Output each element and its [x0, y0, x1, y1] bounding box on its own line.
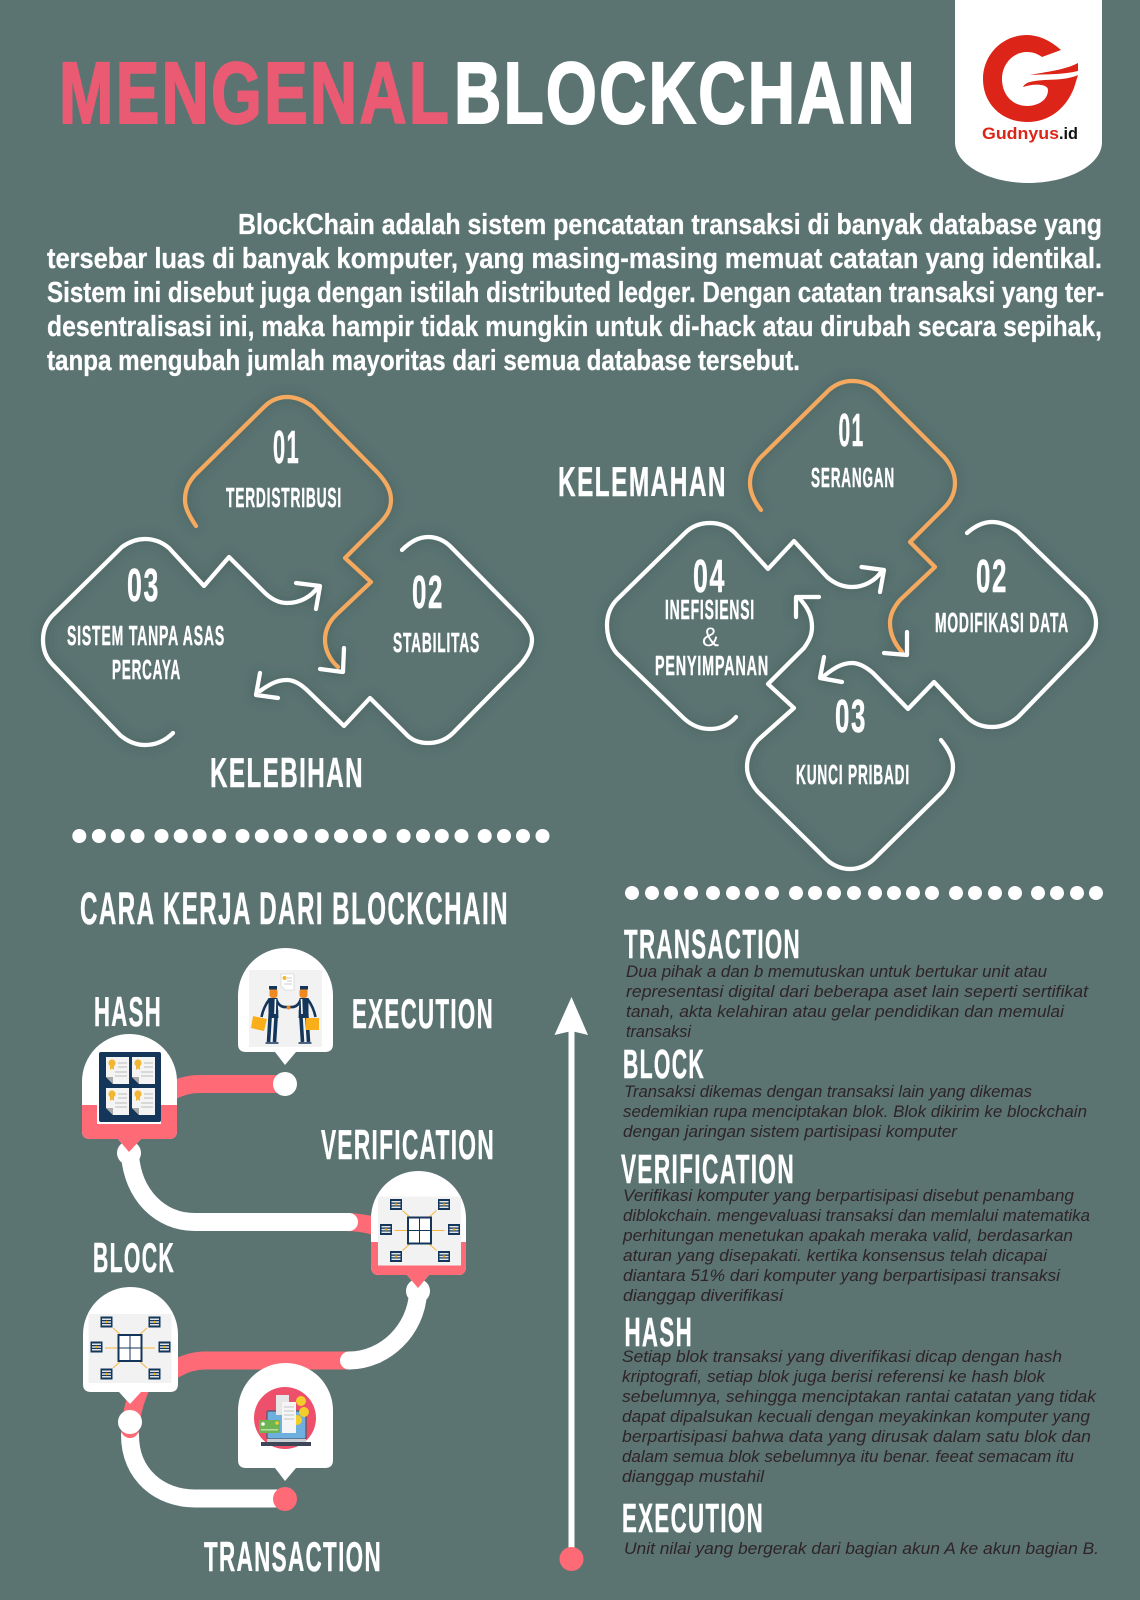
- panel: kelemahan cycle: SERANGAN: [811, 462, 895, 493]
- text block: execution: [622, 1495, 1099, 1558]
- item 02: 02: [976, 550, 1008, 602]
- text block: execution: EXECUTION: [622, 1495, 764, 1541]
- label: transaction: TRANSACTION: [204, 1533, 382, 1580]
- text block: hash: kriptografi, setiap blok juga berisi referensi ke hash blok: [622, 1367, 1047, 1386]
- item 02: 02: [412, 566, 444, 618]
- text block: transaction: transaksi: [626, 1022, 692, 1041]
- text block: transaction: [624, 921, 1089, 1041]
- text block: block: dengan jaringan sistem partisipasi komputer: [623, 1122, 958, 1141]
- title: MENGENAL: [59, 45, 451, 142]
- item 03: 03: [835, 690, 867, 742]
- text block: hash: [622, 1309, 1098, 1486]
- label: block: BLOCK: [93, 1234, 175, 1281]
- title: [59, 45, 917, 142]
- text block: verification: VERIFICATION: [621, 1146, 795, 1192]
- pin: execution: [238, 948, 333, 1065]
- intro paragraph: [47, 209, 1104, 377]
- item 03: PERCAYA: [112, 654, 181, 685]
- text block: verification: aturan yang disepakati. kertika konsensus telah dicapai: [623, 1246, 1048, 1265]
- label: verification: VERIFICATION: [321, 1121, 495, 1168]
- item 03: [796, 690, 910, 790]
- item 02: [393, 566, 480, 658]
- arrow: vertical timeline: [554, 997, 588, 1571]
- shape: modifikasi data outline with arrow: [820, 522, 1096, 727]
- logo badge: Gudnyus.id: [955, 0, 1102, 183]
- text block: transaction: tanah, akta kelahiran atau gelar pendidikan dan memulai: [626, 1002, 1065, 1021]
- icon: network of computers: [88, 1314, 172, 1383]
- heading: kelemahan: KELEMAHAN: [558, 458, 727, 505]
- connector: verification to block: [175, 1279, 430, 1369]
- icon: laptop payment: [254, 1387, 316, 1449]
- item 01: [226, 421, 342, 513]
- panel: kelebihan cycle: SISTEM TANPA ASAS: [67, 620, 225, 651]
- text block: verification: perhitungan menetukan apakah meraka valid, berdasarkan: [622, 1226, 1073, 1245]
- text block: verification: Verifikasi komputer yang berpartisipasi disebut penambang: [623, 1186, 1075, 1205]
- text block: hash: dapat dipalsukan kecuali dengan meyakinkan komputer yang: [622, 1407, 1091, 1426]
- label: hash: HASH: [94, 988, 162, 1035]
- panel: kelebihan cycle: TERDISTRIBUSI: [226, 482, 342, 513]
- text block: transaction: representasi digital dari beberapa aset lain seperti sertifikat: [626, 982, 1089, 1001]
- icon: four documents: [99, 1052, 161, 1122]
- logo badge: Gudnyus.id: .id: [1059, 124, 1078, 143]
- icon: network of computers: [378, 1196, 461, 1266]
- item 01: 01: [838, 404, 864, 456]
- text block: transaction: Dua pihak a dan b memutuskan untuk bertukar unit atau: [626, 962, 1048, 981]
- panel: kelebihan cycle: STABILITAS: [393, 627, 480, 658]
- flow diagram: blockchain steps: [82, 948, 495, 1580]
- item 03: [67, 559, 225, 685]
- item 04: &: [702, 622, 719, 652]
- shape: terdistribusi orange outline with arrow: [185, 397, 391, 672]
- icon: document: [281, 974, 294, 990]
- item 01: [811, 404, 895, 493]
- text block: verification: [621, 1146, 1090, 1305]
- item 04: [655, 550, 769, 681]
- item 01: 01: [273, 421, 300, 473]
- text block: block: BLOCK: [623, 1041, 705, 1087]
- logo badge: Gudnyus.id: Gudnyus: [982, 124, 1059, 143]
- pin: block: [83, 1287, 178, 1404]
- panel: kelemahan cycle: [558, 381, 1096, 869]
- item 03: 03: [127, 559, 160, 611]
- text block: hash: berpartisipasi bahwa data yang dirusak dalam satu blok dan: [622, 1427, 1091, 1446]
- pin: hash: [82, 1034, 177, 1152]
- shape: sistem tanpa asas percaya outline with arrow: [43, 539, 320, 745]
- text block: verification: dianggap diverifikasi: [623, 1286, 784, 1305]
- text block: execution: Unit nilai yang bergerak dari bagian akun A ke akun bagian B.: [624, 1539, 1099, 1558]
- pin: verification: [371, 1171, 466, 1288]
- shape: kunci pribadi outline with arrow: [747, 597, 953, 869]
- connector: block to transaction: [118, 1385, 297, 1511]
- text block: block: Transaksi dikemas dengan transaksi lain yang dikemas: [624, 1082, 1032, 1101]
- text block: hash: Setiap blok transaksi yang diverifikasi dicap dengan hash: [622, 1347, 1062, 1366]
- item 04: PENYIMPANAN: [655, 650, 769, 681]
- text block: verification: diantara 51% dari komputer yang berpartisipasi transaksi: [623, 1266, 1061, 1285]
- connector: hash to verification: [117, 1141, 375, 1226]
- item 04: 04: [693, 550, 726, 602]
- text block: hash: dianggap mustahil: [622, 1467, 765, 1486]
- text block: block: sedemikian rupa menciptakan blok. Blok dikirim ke blockchain: [623, 1102, 1087, 1121]
- pin: transaction: [238, 1363, 333, 1481]
- item 04: INEFISIENSI: [665, 594, 755, 625]
- intro paragraph: tanpa mengubah jumlah mayoritas dari semua database tersebut.: [47, 345, 800, 377]
- shape: stabilitas outline with arrow: [256, 537, 532, 743]
- label: execution: EXECUTION: [352, 990, 494, 1037]
- text block: hash: HASH: [624, 1309, 693, 1355]
- text block: hash: dalam semua blok sebelumnya itu benar. feeat semacam itu: [622, 1447, 1075, 1466]
- text block: hash: sebelumnya, sehingga menciptakan rantai catatan yang tidak: [622, 1387, 1098, 1406]
- shape: inefisiensi outline with arrow: [607, 523, 884, 729]
- text block: verification: diblokchain. mengevaluasi transaksi dan memlalui matematika: [623, 1206, 1090, 1225]
- heading: cara kerja: CARA KERJA DARI BLOCKCHAIN: [80, 883, 509, 934]
- item 02: [935, 550, 1069, 638]
- icon: businessmen shaking hands: [251, 986, 319, 1043]
- panel: kelebihan cycle: [43, 397, 532, 796]
- text block: block: [623, 1041, 1087, 1141]
- text block: transaction: TRANSACTION: [624, 921, 801, 967]
- heading: kelebihan: KELEBIHAN: [210, 749, 364, 796]
- title: BLOCKCHAIN: [454, 45, 917, 142]
- connector: execution to hash: [172, 1072, 297, 1096]
- shape: serangan orange outline with arrow: [750, 381, 955, 655]
- panel: kelemahan cycle: KUNCI PRIBADI: [796, 759, 910, 790]
